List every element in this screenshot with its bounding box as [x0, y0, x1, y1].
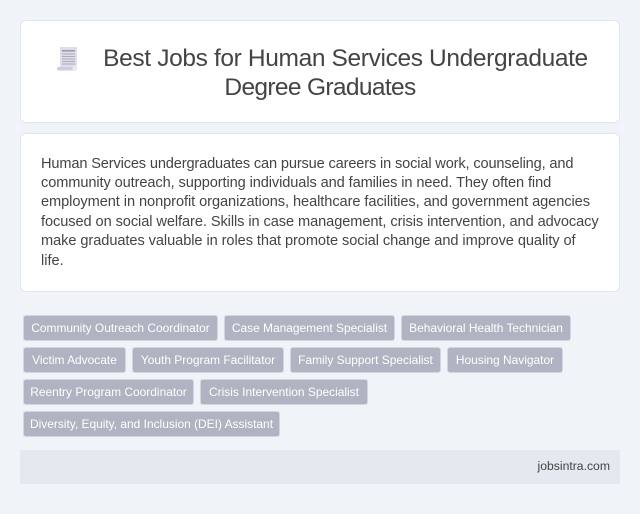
text block: summary: employment in nonprofit organizations, healthcare facilities, and government agencies: [41, 194, 590, 210]
text block: summary: Human Services undergraduates can pursue careers in social work, counseling, and: [41, 156, 573, 172]
text block: summary: focused on social welfare. Skills in case management, crisis intervention, and advocacy: [41, 214, 599, 230]
tag: Diversity, Equity, and Inclusion (DEI) Assistant: Diversity, Equity, and Inclusion (DEI) Assistant: [30, 417, 273, 431]
tag: Behavioral Health Technician: [401, 315, 571, 341]
title: Best Jobs for Human Services Undergraduate: [103, 45, 588, 72]
tag: Youth Program Facilitator: Youth Program Facilitator: [141, 353, 275, 367]
tag: Family Support Specialist: Family Support Specialist: [298, 353, 433, 367]
tag: Reentry Program Coordinator: Reentry Program Coordinator: [30, 385, 187, 399]
tag: Diversity, Equity, and Inclusion (DEI) Assistant: [23, 411, 280, 437]
tag: Case Management Specialist: [224, 315, 395, 341]
footer bar: [20, 450, 620, 484]
icon: paper scroll: [57, 47, 77, 71]
tag: Housing Navigator: Housing Navigator: [456, 353, 554, 367]
text block: summary: [41, 156, 599, 269]
tag: Family Support Specialist: [290, 347, 441, 373]
tag: Crisis Intervention Specialist: [200, 379, 368, 405]
text block: summary: life.: [41, 253, 64, 269]
tag: Crisis Intervention Specialist: Crisis Intervention Specialist: [209, 385, 359, 399]
panel: summary card: [20, 133, 620, 292]
tag: Housing Navigator: [447, 347, 563, 373]
footer text: jobsintra.com: [538, 459, 610, 473]
tag: Reentry Program Coordinator: [23, 379, 194, 405]
text block: summary: make graduates valuable in roles that promote social change and improve quality of: [41, 233, 576, 249]
tag: Community Outreach Coordinator: [23, 315, 218, 341]
tag: Case Management Specialist: Case Management Specialist: [232, 321, 387, 335]
panel: title card: [20, 20, 620, 123]
tag: Community Outreach Coordinator: Community Outreach Coordinator: [31, 321, 210, 335]
tag: Behavioral Health Technician: Behavioral Health Technician: [409, 321, 563, 335]
tag: Victim Advocate: Victim Advocate: [32, 353, 117, 367]
title: Degree Graduates: [224, 74, 416, 101]
text block: summary: community outreach, supporting individuals and families in need. They often find: [41, 175, 551, 191]
tag: Victim Advocate: [23, 347, 126, 373]
tag: Youth Program Facilitator: [132, 347, 284, 373]
title: [103, 45, 588, 101]
job tags: [23, 315, 571, 437]
